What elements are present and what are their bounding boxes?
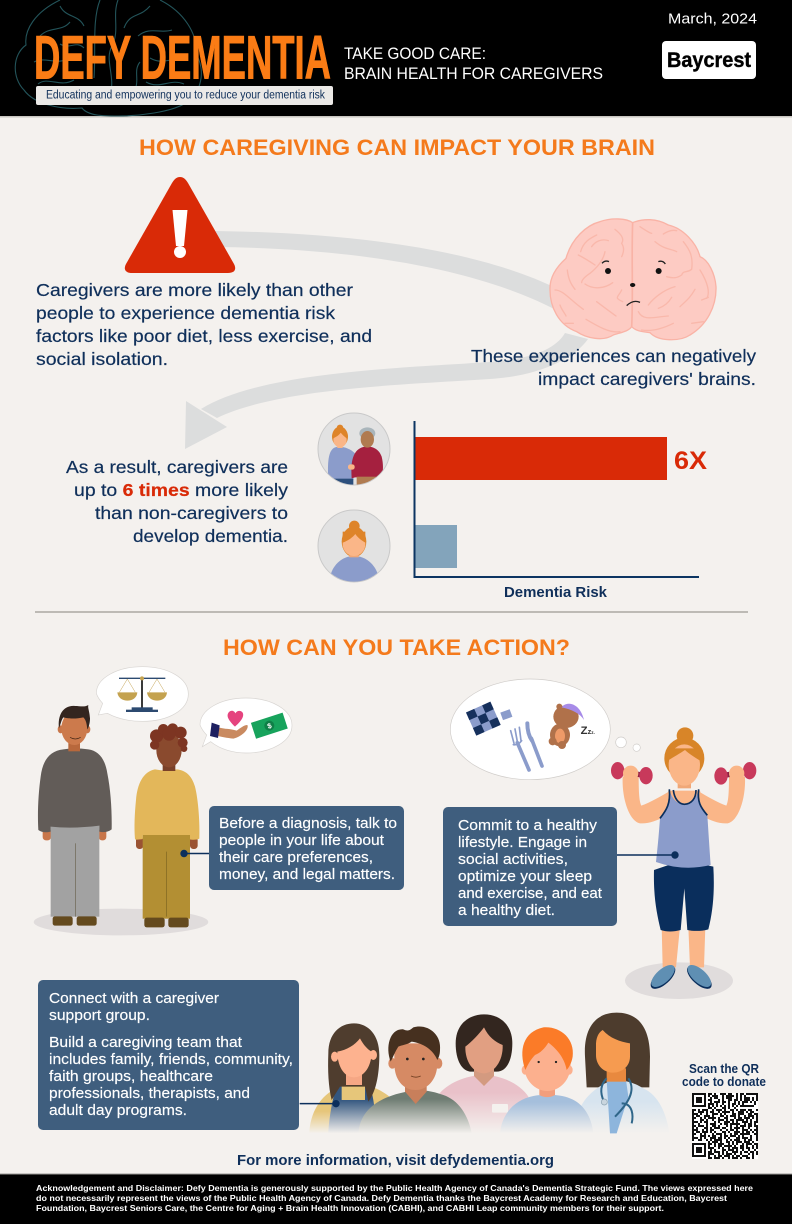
icon: puzzle	[466, 702, 501, 736]
icon: sleeping teddy bear: Zzz.	[581, 725, 595, 737]
heading: how caregiving can impact your brain: HOW CAREGIVING CAN IMPACT YOUR BRAIN	[139, 135, 655, 160]
callout: before a diagnosis: people in your life about	[219, 833, 384, 849]
text: caregivers risk factors: people to experience dementia risk	[36, 303, 335, 323]
value label: 6X	[674, 447, 707, 475]
heading: how can you take action: HOW CAN YOU TAKE ACTION?	[223, 635, 570, 660]
icon: banknote: $	[266, 721, 273, 731]
callout: healthy lifestyle: Commit to a healthy	[458, 818, 598, 834]
person: woman	[135, 723, 199, 927]
footer disclaimer: Foundation, Baycrest Seniors Care, the Centre for Aging + Brain Health Innovation (CABHI), and CABHI Leap community members for their support.	[36, 1203, 664, 1213]
axis label: Dementia Risk	[504, 585, 608, 601]
icon: scales	[117, 676, 167, 712]
text: caregivers risk factors: social isolation.	[36, 349, 168, 369]
icon: header brain outline	[15, 0, 201, 116]
icon: fork and knife	[511, 723, 542, 770]
subtitle: BRAIN HEALTH FOR CAREGIVERS	[344, 65, 603, 83]
person: red-haired person in blue	[500, 1027, 593, 1133]
text: caregivers risk factors	[36, 280, 372, 369]
logo: Baycrest	[662, 41, 756, 79]
text: six times more likely: than non-caregivers to	[95, 503, 288, 523]
bar chart: dementia risk	[414, 421, 707, 601]
tagline: Educating and empowering you to reduce your dementia risk	[46, 90, 325, 102]
tagline	[36, 86, 333, 105]
illustration: two people talking	[34, 667, 292, 935]
donate prompt	[682, 1062, 766, 1089]
text: negative impact on brains: These experiences can negatively	[471, 346, 756, 366]
callout: before a diagnosis	[180, 806, 404, 890]
person: woman in yellow	[309, 1023, 389, 1133]
header band	[0, 0, 792, 118]
person: man	[38, 705, 112, 926]
text: caregivers risk factors: factors like poor diet, less exercise, and	[36, 326, 372, 346]
brain face	[602, 261, 665, 306]
date: March, 2024	[668, 10, 757, 28]
bar: caregivers	[415, 437, 667, 480]
speech bubble: legal scales	[96, 667, 188, 721]
callout: healthy lifestyle: lifestyle. Engage in	[458, 835, 587, 851]
text: six times more likely: develop dementia.	[133, 526, 288, 546]
portrait: caregiver with older adult	[318, 413, 390, 485]
person: nurse in pink	[438, 1014, 528, 1133]
footer disclaimer	[0, 1174, 792, 1224]
ground shadow	[34, 909, 208, 935]
footer disclaimer: do not necessarily represent the views of the Public Health Agency of Canada. Defy Dementia thanks the Baycrest Academy for Research and Education, Baycrest	[36, 1193, 727, 1203]
person: exercising woman	[611, 727, 756, 993]
person: doctor	[573, 1013, 669, 1133]
text: six times more likely: up to 6 times more likely	[74, 480, 288, 500]
dumbbell right	[714, 762, 756, 785]
callout: caregiver support: Build a caregiving team that	[49, 1035, 242, 1051]
icon: warning triangle	[125, 177, 235, 273]
icon: worried brain	[550, 219, 716, 340]
callout: caregiver support: faith groups, healthcare	[49, 1069, 213, 1085]
callout: healthy lifestyle	[443, 807, 679, 926]
portraits: caregiver and non-caregiver	[318, 413, 390, 587]
callout: before a diagnosis: money, and legal matters.	[219, 867, 395, 883]
subtitle	[344, 45, 603, 83]
ground shadow	[625, 962, 733, 999]
callout: caregiver support: includes family, friends, community,	[49, 1052, 293, 1068]
thought bubble	[450, 679, 640, 780]
callout: healthy lifestyle: a healthy diet.	[458, 903, 555, 919]
dumbbell left	[611, 762, 653, 784]
callout: caregiver support: adult day programs.	[49, 1103, 187, 1119]
callout: before a diagnosis: their care preferences,	[219, 850, 373, 866]
callout: caregiver support: professionals, therapists, and	[49, 1086, 250, 1102]
speech bubble: care and money	[200, 698, 292, 753]
callout: healthy lifestyle: optimize your sleep	[458, 869, 592, 885]
callout: caregiver support	[38, 980, 299, 1130]
callout: caregiver support: support group.	[49, 1008, 150, 1024]
donate prompt: Scan the QR	[689, 1062, 759, 1076]
person: man in grey-green	[358, 1026, 472, 1133]
illustration: care team	[300, 1013, 669, 1133]
illustration: woman exercising with thought bubble	[450, 679, 756, 999]
connector line	[300, 1100, 340, 1107]
footer disclaimer: Acknowledgement and Disclaimer: Defy Dementia is generously supported by the Public Health Agency of Canada's Dementia Strategic Fund. The views expressed here	[36, 1183, 753, 1193]
icon: hand and heart	[210, 711, 248, 739]
icon: sleeping teddy bear	[549, 704, 595, 749]
bar: non-caregivers	[415, 525, 457, 568]
text: caregivers risk factors: Caregivers are more likely than other	[36, 280, 353, 300]
text: negative impact on brains	[471, 346, 756, 389]
callout: before a diagnosis: Before a diagnosis, talk to	[219, 816, 397, 832]
text: six times more likely: As a result, caregivers are	[66, 457, 288, 477]
chart axes	[414, 421, 699, 577]
text: negative impact on brains: impact caregivers' brains.	[538, 369, 756, 389]
portrait: non-caregiver	[318, 510, 390, 587]
callout: healthy lifestyle: and exercise, and eat	[458, 886, 602, 902]
link: more information: For more information, visit defydementia.org	[237, 1152, 554, 1169]
subtitle: TAKE GOOD CARE:	[344, 45, 486, 63]
QR code	[692, 1093, 758, 1159]
logo: Baycrest: Baycrest	[667, 49, 751, 72]
title: DEFY DEMENTIA	[34, 24, 331, 92]
callout: caregiver support: Connect with a caregiver	[49, 991, 219, 1007]
donate prompt: code to donate	[682, 1075, 766, 1089]
text: six times more likely	[66, 457, 288, 546]
arrow: grey flow arrow from warning through brain to result	[185, 231, 588, 449]
callout: healthy lifestyle: social activities,	[458, 852, 568, 868]
